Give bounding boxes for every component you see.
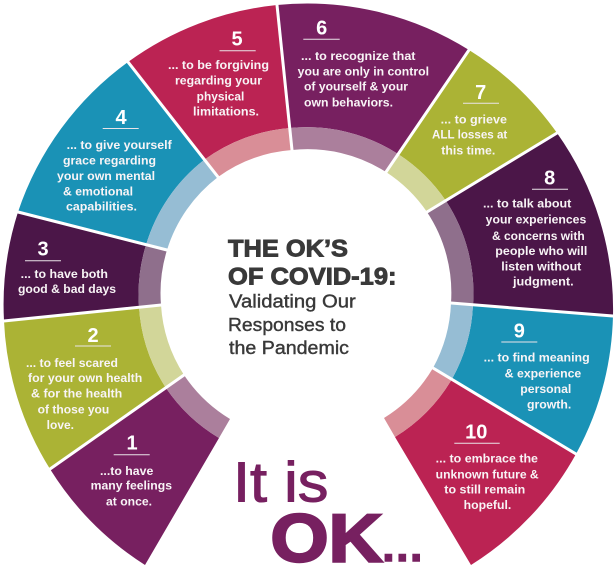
text: segment 1: many feelings xyxy=(91,481,172,493)
number 10: 10 xyxy=(465,422,487,444)
text: segment 8: judgment. xyxy=(512,277,574,289)
text: segment 7 xyxy=(432,115,507,158)
text: segment 8: listen without xyxy=(501,262,581,274)
heading: It is OK...: ... xyxy=(382,516,423,572)
number 4: 4 xyxy=(115,107,127,129)
text: segment 5: physical xyxy=(197,92,244,104)
text: segment 2: love. xyxy=(47,420,74,432)
title: the Pandemic xyxy=(229,338,349,358)
panel: segment 1 xyxy=(50,375,230,565)
text: segment 6: you are only in control xyxy=(298,67,429,79)
heading: It is OK...: It is xyxy=(233,451,328,515)
panel: segment 8 xyxy=(427,133,613,316)
text: segment 5 xyxy=(168,60,269,119)
text: segment 10: hopeful. xyxy=(464,500,511,512)
text: segment 7: ALL losses at xyxy=(432,130,507,142)
panel: segment 7 xyxy=(386,50,557,212)
number 5: 5 xyxy=(231,29,243,51)
text: segment 7: this time. xyxy=(441,146,495,158)
text: segment 3: good & bad days xyxy=(18,284,116,296)
text: segment 4: your own mental xyxy=(57,171,155,183)
text: segment 4: ... to give yourself xyxy=(67,140,172,152)
text: segment 2 xyxy=(26,358,142,432)
title: Responses to xyxy=(228,315,346,335)
text: segment 4 xyxy=(57,140,172,214)
text: segment 4: grace regarding xyxy=(63,156,156,168)
text: segment 3: ... to have both xyxy=(21,269,108,281)
heading: It is OK...: OK xyxy=(270,500,382,576)
text: segment 6 xyxy=(298,51,429,110)
text: segment 10: to still remain xyxy=(444,485,525,497)
text: segment 9: personal xyxy=(520,384,571,396)
heading: It is OK... xyxy=(233,451,423,576)
text: segment 5: ... to be forgiving xyxy=(168,60,269,72)
title: Validating Our xyxy=(229,292,356,312)
text: segment 2: for your own health xyxy=(28,373,142,385)
text: segment 6: ... to recognize that xyxy=(301,51,416,63)
text: segment 10: unknown future & xyxy=(436,470,539,482)
panel: segment 6 xyxy=(277,4,469,172)
text: segment 7: ... to grieve xyxy=(441,115,507,127)
text: segment 1: ...to have xyxy=(100,466,153,478)
text: segment 2: & for the health xyxy=(31,389,122,401)
text: segment 8: your experiences xyxy=(486,214,586,226)
text: segment 8 xyxy=(483,199,587,289)
text: segment 9 xyxy=(484,352,590,411)
text: segment 9: growth. xyxy=(527,399,571,411)
text: segment 5: limitations. xyxy=(193,107,259,119)
text: segment 4: capabilities. xyxy=(66,202,137,214)
text: segment 6: own behaviors. xyxy=(304,98,393,110)
number 7: 7 xyxy=(475,82,486,104)
panel: segment 3 xyxy=(4,212,167,321)
number 3: 3 xyxy=(37,239,49,261)
number 8: 8 xyxy=(544,167,555,189)
text: segment 9: & experience xyxy=(505,368,581,380)
title xyxy=(228,236,396,358)
text: segment 4: & emotional xyxy=(63,187,133,199)
text: segment 6: of yourself & your xyxy=(304,82,409,94)
number 9: 9 xyxy=(514,321,525,343)
number 1: 1 xyxy=(126,433,138,455)
text: segment 8: ... to talk about xyxy=(483,199,571,211)
panel: segment 5 xyxy=(128,5,292,177)
text: segment 1 xyxy=(91,466,172,509)
panel: segment 9 xyxy=(433,303,613,454)
panel: segment 2 xyxy=(4,305,184,469)
text: segment 2: ... to feel scared xyxy=(26,358,118,370)
panel: segment 10 xyxy=(384,368,576,565)
text: segment 3 xyxy=(18,269,116,296)
text: segment 8: people who will xyxy=(495,246,587,258)
text: segment 9: ... to find meaning xyxy=(484,352,590,364)
text: segment 10 xyxy=(436,454,539,512)
number 2: 2 xyxy=(87,325,99,347)
title: THE OK’S xyxy=(228,236,348,263)
panel: segment 4 xyxy=(18,62,218,250)
text: segment 10: ... to embrace the xyxy=(436,454,538,466)
text: segment 5: regarding your xyxy=(175,76,263,88)
title: OF COVID-19: xyxy=(228,263,396,290)
text: segment 2: of those you xyxy=(38,405,109,417)
number 6: 6 xyxy=(316,17,327,39)
text: segment 8: & concerns with xyxy=(492,231,585,243)
text: segment 1: at once. xyxy=(106,497,152,509)
